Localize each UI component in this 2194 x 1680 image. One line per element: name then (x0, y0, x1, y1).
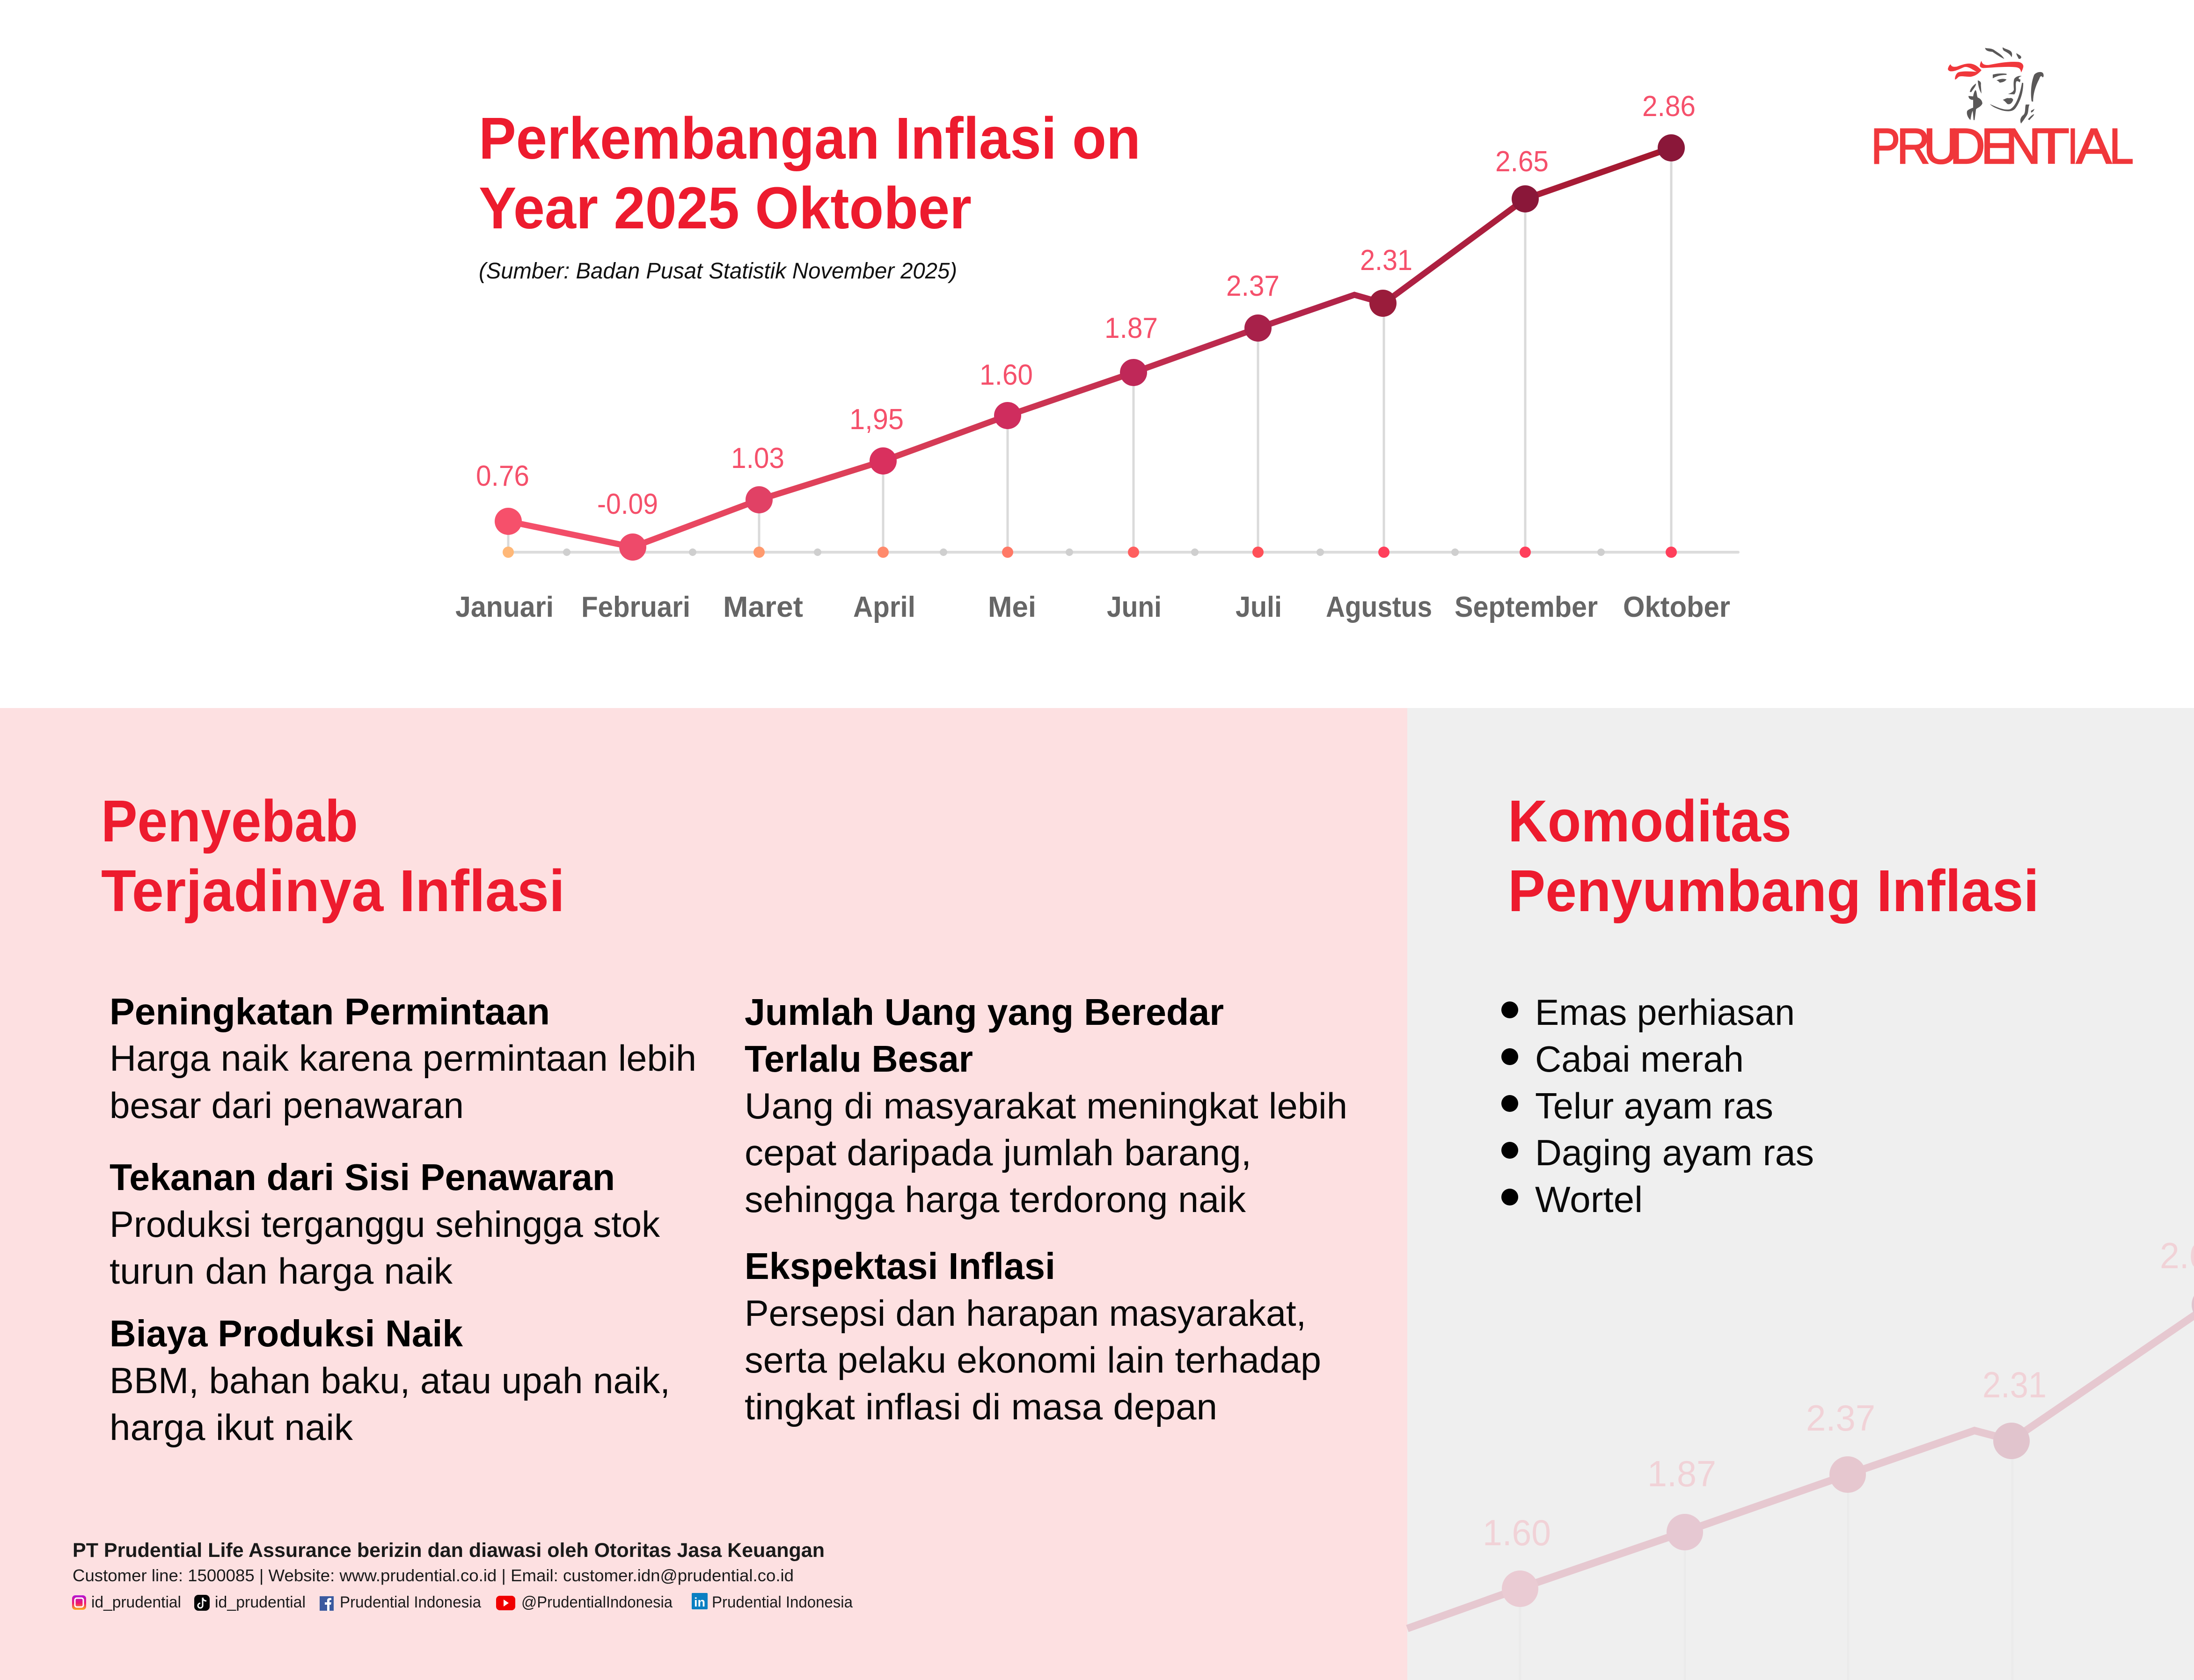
text block: increased demand: Harga naik karena permintaan lebih (110, 1037, 696, 1079)
bullet list: commodities: Wortel (1535, 1179, 1643, 1220)
faded decorative chart: 1.87 (1647, 1453, 1716, 1494)
logo: Prudential: E (1981, 118, 2013, 174)
text block: supply pressure: turun dan harga naik (110, 1250, 453, 1292)
chart month labels: Maret (723, 591, 803, 623)
chart value labels: 2.65 (1495, 146, 1549, 178)
text block: money supply (745, 991, 1347, 1220)
chart month labels: Februari (581, 591, 690, 623)
text block: production costs: harga ikut naik (110, 1407, 353, 1448)
chart value labels: -0.09 (597, 488, 658, 520)
chart month labels: Januari (455, 591, 554, 623)
footer: social media: id_prudential (91, 1593, 181, 1611)
chart value labels: 1.87 (1104, 312, 1158, 344)
text block: money supply: Terlalu Besar (745, 1038, 973, 1080)
chart value labels: 1,95 (849, 403, 904, 436)
logo: Prudential: R (1897, 118, 1930, 174)
icon: tiktok (194, 1595, 210, 1611)
chart month labels: Agustus (1326, 591, 1432, 623)
footer: company and contact (73, 1539, 825, 1585)
chart value labels: 0.76 (476, 460, 529, 492)
chart month labels: September (1455, 591, 1598, 623)
logo: Prudential: D (1950, 118, 1985, 174)
faded decorative chart: 2.37 (1806, 1397, 1875, 1439)
logo: Prudential: T (2033, 118, 2070, 174)
logo: Prudential: P (1871, 118, 1900, 174)
panel: commodities background (1407, 708, 2194, 1680)
source note: (Sumber: Badan Pusat Statistik November 2025) (479, 259, 957, 284)
title: Year 2025 Oktober (479, 175, 972, 241)
heading: causes of inflation: Penyebab (101, 788, 358, 854)
text block: increased demand (110, 991, 696, 1126)
bullet list: commodities: Emas perhiasan (1535, 992, 1795, 1033)
text block: money supply: Jumlah Uang yang Beredar (745, 991, 1224, 1033)
footer: social media: Prudential Indonesia (712, 1593, 853, 1611)
footer: social media: id_prudential (215, 1593, 306, 1611)
heading: commodities contributing to inflation: Komoditas (1508, 788, 1792, 854)
chart month labels: Juni (1107, 591, 1162, 623)
chart value labels: 2.86 (1642, 90, 1696, 123)
logo: Prudential: U (1923, 118, 1959, 174)
faded decorative chart (1407, 1235, 2194, 1680)
heading: causes of inflation: Terjadinya Inflasi (101, 858, 565, 924)
panel: causes background (0, 708, 1407, 1680)
text block: inflation expectations (745, 1245, 1321, 1427)
text block: increased demand: besar dari penawaran (110, 1085, 464, 1126)
line chart: monthly inflation (495, 134, 1740, 561)
logo: Prudential (1871, 47, 2134, 174)
title (479, 105, 1141, 241)
icon: youtube (496, 1596, 515, 1610)
text block: money supply: cepat daripada jumlah barang, (745, 1132, 1251, 1173)
chart month labels: Oktober (1623, 591, 1730, 623)
panel: top white background (0, 0, 2194, 708)
logo: Prudential: I (2068, 118, 2078, 174)
text block: increased demand: Peningkatan Permintaan (110, 991, 550, 1032)
text block: inflation expectations: Persepsi dan harapan masyarakat, (745, 1293, 1306, 1334)
footer: company and contact: PT Prudential Life Assurance berizin dan diawasi oleh Otoritas Jasa Keuangan (73, 1539, 825, 1562)
icon: instagram (72, 1595, 86, 1610)
footer: company and contact: Customer line: 1500085 | Website: www.prudential.co.id | Email: customer.idn@prudential.co.id (73, 1566, 794, 1585)
text block: money supply: sehingga harga terdorong naik (745, 1179, 1246, 1220)
faded decorative chart: 1.60 (1483, 1512, 1551, 1553)
footer: social media (72, 1593, 853, 1611)
footer: social media: Prudential Indonesia (340, 1593, 481, 1611)
icon: linkedin: in (694, 1595, 705, 1609)
faded decorative chart: 2.31 (1982, 1364, 2047, 1405)
chart value labels (476, 90, 1696, 520)
chart month labels: April (853, 591, 915, 623)
text block: production costs: Biaya Produksi Naik (110, 1313, 463, 1354)
footer: social media: @PrudentialIndonesia (521, 1593, 673, 1611)
bullet list: commodities: Telur ayam ras (1535, 1085, 1773, 1126)
text block: supply pressure: Tekanan dari Sisi Penawaran (110, 1156, 615, 1198)
text block: inflation expectations: tingkat inflasi di masa depan (745, 1386, 1217, 1427)
text block: production costs (110, 1313, 670, 1448)
text block: production costs: BBM, bahan baku, atau upah naik, (110, 1360, 670, 1401)
logo: Prudential: A (2076, 118, 2112, 174)
heading: causes of inflation (101, 788, 565, 924)
icon: linkedin (692, 1593, 708, 1609)
chart value labels: 2.31 (1360, 244, 1412, 277)
chart month labels (455, 591, 1730, 623)
text block: inflation expectations: serta pelaku ekonomi lain terhadap (745, 1339, 1321, 1381)
text block: supply pressure (110, 1156, 660, 1292)
text block: money supply: Uang di masyarakat meningkat lebih (745, 1085, 1347, 1126)
bullet list: commodities (1501, 992, 1814, 1220)
chart value labels: 1.60 (980, 359, 1033, 391)
bullet list: commodities: Cabai merah (1535, 1038, 1744, 1080)
bullet list: commodities: Daging ayam ras (1535, 1132, 1814, 1173)
chart value labels: 1.03 (731, 442, 784, 475)
text block: inflation expectations: Ekspektasi Inflasi (745, 1245, 1055, 1287)
heading: commodities contributing to inflation: Penyumbang Inflasi (1508, 858, 2039, 924)
logo: Prudential: N (2005, 118, 2041, 174)
title: Perkembangan Inflasi on (479, 105, 1141, 171)
text block: supply pressure: Produksi terganggu sehingga stok (110, 1204, 660, 1245)
icon: facebook (320, 1596, 334, 1611)
heading: commodities contributing to inflation (1508, 788, 2039, 924)
logo: Prudential: L (2109, 118, 2134, 174)
chart month labels: Mei (988, 591, 1036, 623)
chart value labels: 2.37 (1226, 270, 1280, 302)
chart month labels: Juli (1236, 591, 1282, 623)
